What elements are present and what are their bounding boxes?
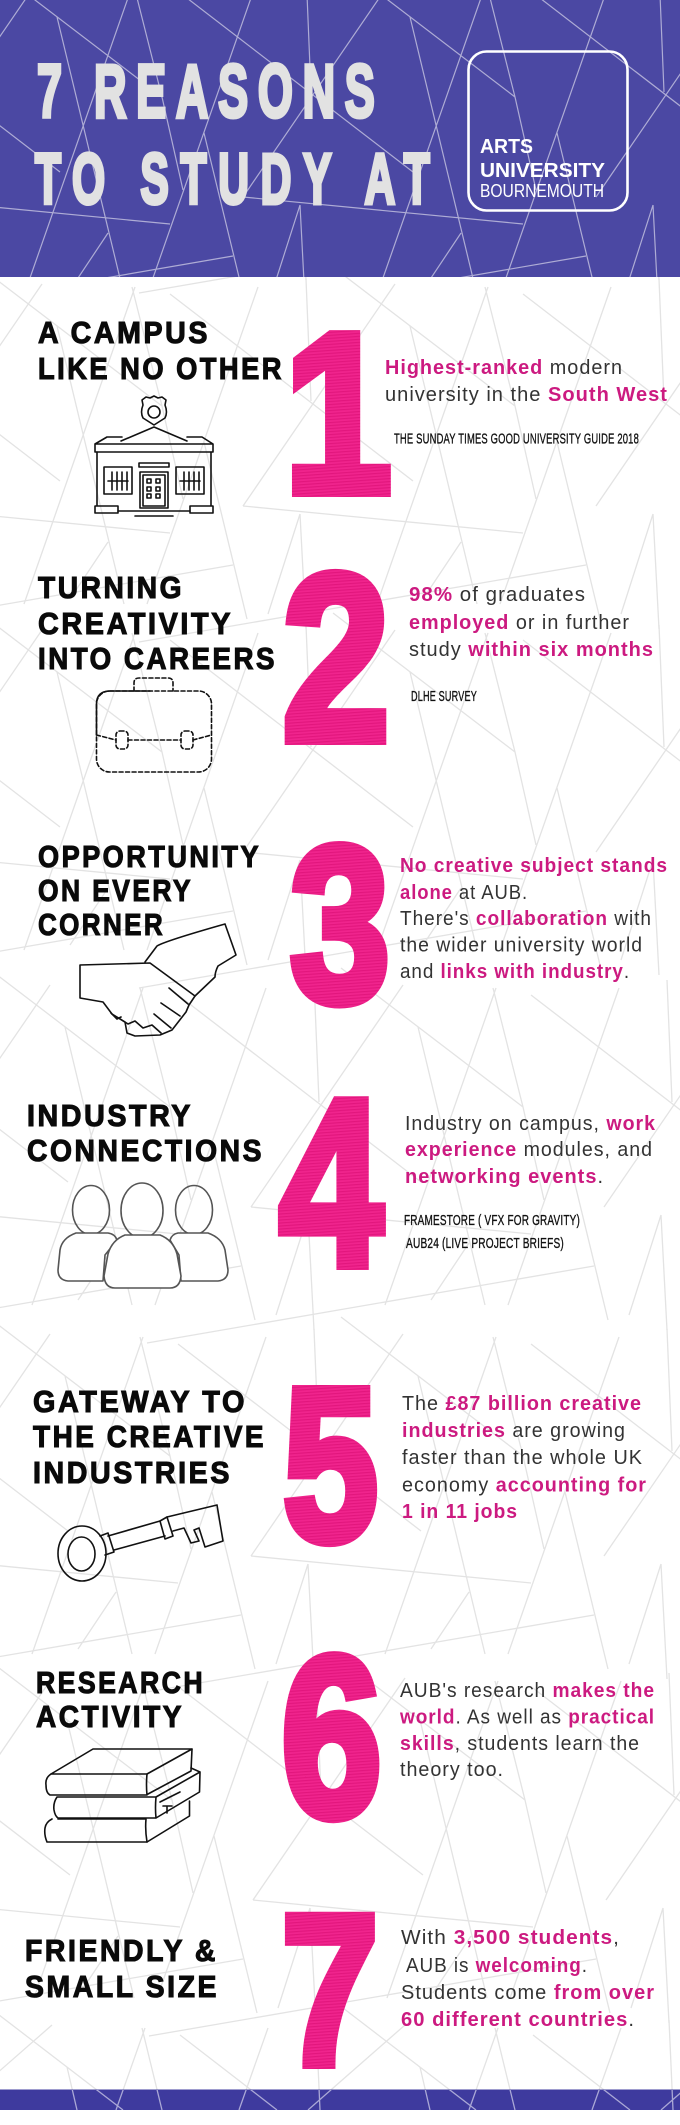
numeral 7: 7 bbox=[282, 1871, 378, 2110]
numeral 2: 2 bbox=[282, 526, 390, 791]
text: collaboration: alone at AUB. bbox=[400, 882, 528, 904]
heading: research activity bbox=[36, 1665, 205, 1734]
text: creative industries: economy accounting for bbox=[402, 1474, 647, 1496]
text: work experience: networking events. bbox=[405, 1166, 604, 1188]
text: research: skills, students learn the bbox=[400, 1733, 640, 1755]
heading: friendly and small size: FRIENDLY & bbox=[25, 1933, 218, 1968]
text: research: world. As well as practical bbox=[399, 1706, 655, 1728]
logo: Arts University Bournemouth: BOURNEMOUTH bbox=[480, 181, 604, 201]
panel: reason 4 bbox=[27, 1051, 656, 1316]
text: graduate employment: employed or in further bbox=[409, 612, 630, 634]
text: creative industries: The £87 billion creative bbox=[402, 1393, 642, 1415]
heading: industry connections: INDUSTRY bbox=[27, 1098, 193, 1133]
heading: opportunity on every corner: OPPORTUNITY bbox=[38, 839, 261, 874]
numeral 3: 3 bbox=[290, 801, 390, 1049]
text: welcoming: 60 different countries. bbox=[401, 2009, 635, 2031]
numeral 4: 4 bbox=[279, 1051, 383, 1316]
heading: gateway to the creative industries: GATEWAY TO bbox=[33, 1384, 247, 1419]
text: welcoming: With 3,500 students , bbox=[401, 1927, 620, 1949]
text: collaboration: There's collaboration with bbox=[400, 908, 652, 930]
text: work experience bbox=[405, 1113, 656, 1188]
heading: a campus like no other: A CAMPUS bbox=[38, 315, 210, 350]
heading: opportunity on every corner bbox=[38, 839, 261, 942]
numeral 1: 1 bbox=[284, 287, 392, 541]
text: graduate employment: 98% of graduates bbox=[409, 584, 586, 606]
heading: gateway to the creative industries: INDUSTRIES bbox=[33, 1455, 232, 1490]
heading: a campus like no other: LIKE NO OTHER bbox=[38, 351, 284, 386]
icon: campus building bbox=[95, 396, 213, 516]
numeral 6: 6 bbox=[281, 1609, 382, 1865]
text: creative industries: industries are growing bbox=[402, 1420, 626, 1442]
numeral 5: 5 bbox=[283, 1344, 378, 1587]
heading: research activity: ACTIVITY bbox=[36, 1699, 184, 1734]
text: research: AUB's research makes the bbox=[400, 1680, 655, 1702]
icon: key bbox=[58, 1505, 223, 1581]
heading: industry connections: CONNECTIONS bbox=[27, 1133, 264, 1168]
source: framestore and AUB24: FRAMESTORE ( VFX FOR GRAVITY) bbox=[404, 1212, 580, 1229]
logo: Arts University Bournemouth: ARTS bbox=[480, 135, 533, 158]
heading: gateway to the creative industries bbox=[33, 1384, 266, 1490]
logo: Arts University Bournemouth: UNIVERSITY bbox=[480, 159, 605, 182]
text: graduate employment: study within six months bbox=[409, 639, 654, 661]
source: DLHE survey: DLHE SURVEY bbox=[411, 688, 477, 705]
text: creative industries bbox=[402, 1393, 647, 1523]
text: creative industries: 1 in 11 jobs bbox=[402, 1501, 518, 1523]
text: graduate employment bbox=[409, 584, 654, 661]
header panel bbox=[0, 0, 680, 277]
heading: turning creativity into careers: TURNING bbox=[38, 570, 184, 605]
heading: opportunity on every corner: ON EVERY bbox=[38, 873, 193, 908]
text: work experience: Industry on campus, work bbox=[405, 1113, 656, 1135]
text: highest-ranked: university in the South West bbox=[385, 384, 668, 406]
text: collaboration: No creative subject stands bbox=[400, 855, 668, 877]
text: work experience: experience modules, and bbox=[405, 1139, 653, 1161]
source: framestore and AUB24 bbox=[404, 1212, 580, 1252]
panel: reason 2 bbox=[38, 526, 654, 791]
text: research: theory too. bbox=[400, 1759, 504, 1781]
title bbox=[35, 50, 430, 219]
text: highest-ranked bbox=[385, 357, 668, 406]
icon: briefcase bbox=[96, 678, 212, 772]
title: TO STUDY AT bbox=[35, 140, 430, 219]
icon: handshake bbox=[80, 924, 236, 1036]
heading: turning creativity into careers: CREATIVITY bbox=[38, 606, 233, 641]
heading: gateway to the creative industries: THE CREATIVE bbox=[33, 1419, 266, 1454]
source: framestore and AUB24: AUB24 (LIVE PROJECT BRIEFS) bbox=[406, 1235, 564, 1252]
heading: opportunity on every corner: CORNER bbox=[38, 907, 165, 942]
text: welcoming: Students come from over bbox=[401, 1982, 655, 2004]
icon: stack of books bbox=[45, 1749, 200, 1842]
panel: reason 7 bbox=[25, 1871, 655, 2110]
panel: reason 6 bbox=[36, 1609, 655, 1865]
heading: industry connections bbox=[27, 1098, 264, 1168]
text: highest-ranked: Highest-ranked modern bbox=[385, 357, 623, 379]
heading: research activity: RESEARCH bbox=[36, 1665, 205, 1700]
text: collaboration bbox=[400, 855, 668, 983]
text: creative industries: faster than the whole UK bbox=[402, 1447, 643, 1469]
panel: reason 1 bbox=[38, 287, 668, 541]
text: collaboration: the wider university world bbox=[400, 934, 643, 956]
title: 7 REASONS bbox=[37, 50, 375, 134]
footer bar bbox=[0, 2090, 680, 2110]
panel: reason 3 bbox=[38, 801, 668, 1049]
text: collaboration: and links with industry. bbox=[400, 961, 630, 983]
text: research bbox=[399, 1680, 655, 1781]
heading: friendly and small size: SMALL SIZE bbox=[25, 1969, 219, 2004]
heading: turning creativity into careers bbox=[38, 570, 277, 676]
heading: a campus like no other bbox=[38, 315, 284, 386]
heading: friendly and small size bbox=[25, 1933, 219, 2004]
panel: reason 5 bbox=[33, 1344, 647, 1587]
text: welcoming: AUB is welcoming. bbox=[406, 1955, 588, 1977]
text: welcoming bbox=[401, 1927, 655, 2031]
logo: Arts University Bournemouth bbox=[468, 52, 628, 210]
heading: turning creativity into careers: INTO CAREERS bbox=[38, 641, 277, 676]
icon: three people bbox=[58, 1183, 228, 1288]
